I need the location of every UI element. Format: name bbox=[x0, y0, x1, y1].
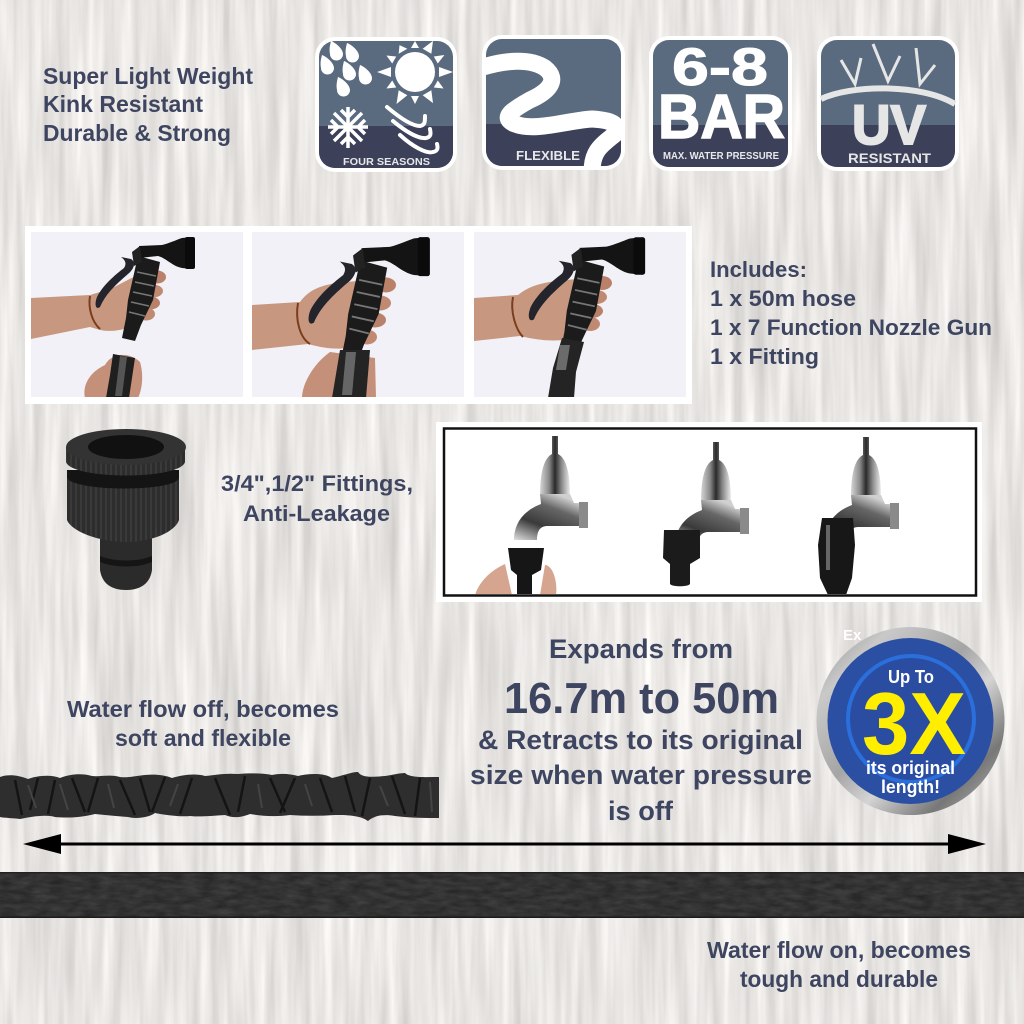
icon: 6-8 bar pressure: MAX. WATER PRESSURE bbox=[663, 151, 779, 162]
tap 3 with hose attached bbox=[818, 437, 899, 595]
caption: water flow on bbox=[707, 937, 971, 992]
text block: expands from: is off bbox=[608, 796, 674, 826]
hose: expanded and straight bbox=[0, 872, 1024, 918]
badge: up to 3X original length: 3X bbox=[862, 674, 966, 773]
text block: expands from bbox=[470, 634, 812, 826]
tap 1 with fitting in hand bbox=[475, 436, 588, 595]
heading: product features: Durable & Strong bbox=[43, 120, 231, 146]
icon: 6-8 bar pressure bbox=[649, 36, 792, 171]
icon: four seasons bbox=[315, 37, 457, 172]
text block: expands from: 16.7m to 50m bbox=[504, 674, 779, 723]
photo: nozzle and coupling apart bbox=[30, 231, 244, 398]
badge: up to 3X original length: length! bbox=[881, 777, 940, 797]
text block: includes bbox=[710, 257, 992, 369]
caption: water flow off: Water flow off, becomes bbox=[67, 696, 339, 722]
caption: fittings: 3/4",1/2" Fittings, bbox=[221, 471, 413, 496]
icon: UV resistant bbox=[817, 36, 959, 171]
heading: product features: Kink Resistant bbox=[43, 91, 203, 117]
photo: coupling half connected bbox=[251, 231, 465, 398]
hose: retracted and crumpled bbox=[0, 772, 439, 821]
icon: flexible bbox=[480, 35, 625, 172]
badge: up to 3X original length: Ex bbox=[843, 627, 862, 644]
caption: water flow off: soft and flexible bbox=[115, 725, 291, 751]
text block: includes: 1 x 50m hose bbox=[710, 286, 856, 311]
icon: UV resistant: UV bbox=[852, 93, 926, 156]
text block: expands from: Expands from bbox=[549, 634, 733, 664]
text block: includes: 1 x Fitting bbox=[710, 344, 819, 369]
heading: product features bbox=[43, 63, 253, 146]
icon: four seasons: FOUR SEASONS bbox=[343, 156, 430, 168]
text block: expands from: size when water pressure bbox=[470, 760, 812, 790]
caption: water flow off bbox=[67, 696, 339, 751]
icon: flexible: FLEXIBLE bbox=[516, 149, 580, 163]
panel: tap connection photos bbox=[436, 422, 982, 602]
icon: 6-8 bar pressure: BAR bbox=[658, 83, 785, 152]
icon: 6-8 bar pressure: 6-8 bbox=[672, 38, 768, 97]
caption: water flow on: Water flow on, becomes bbox=[707, 937, 971, 963]
image: threaded hose fitting bbox=[66, 429, 186, 590]
badge: up to 3X original length: Up To bbox=[888, 667, 934, 687]
text block: includes: 1 x 7 Function Nozzle Gun bbox=[710, 315, 992, 340]
text block: expands from: & Retracts to its original bbox=[478, 725, 803, 755]
badge: up to 3X original length bbox=[816, 627, 1004, 815]
photo: coupling connected bbox=[473, 231, 687, 398]
panel: nozzle assembly photos bbox=[25, 226, 692, 404]
badge: up to 3X original length: its original bbox=[866, 758, 955, 778]
heading: product features: Super Light Weight bbox=[43, 63, 253, 89]
caption: water flow on: tough and durable bbox=[740, 966, 938, 992]
caption: fittings: Anti-Leakage bbox=[243, 501, 390, 526]
tap 2 with fitting attached bbox=[663, 442, 749, 586]
caption: fittings bbox=[221, 471, 413, 526]
icon: UV resistant: RESISTANT bbox=[848, 150, 931, 166]
arrow: double-headed expansion bbox=[23, 834, 986, 854]
text block: includes: Includes: bbox=[710, 257, 807, 282]
